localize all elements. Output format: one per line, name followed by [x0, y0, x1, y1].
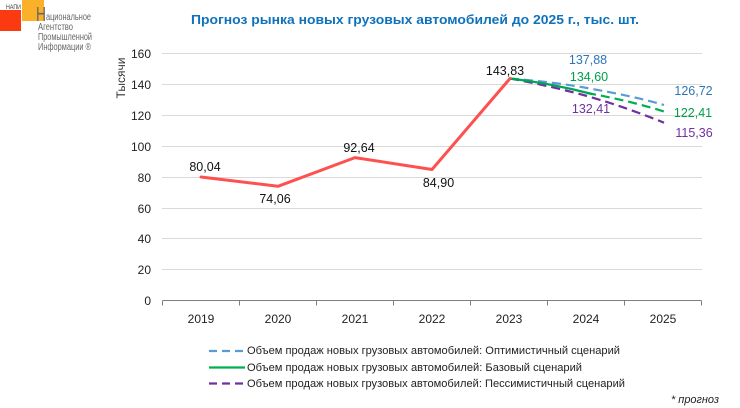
y axis labels: 80 [138, 171, 151, 185]
x axis labels: 2019 [188, 312, 215, 326]
data labels: pessimistic: 115,36 [675, 126, 713, 140]
x axis [162, 300, 702, 306]
x axis labels: 2021 [342, 312, 369, 326]
data labels: base: 134,60 [570, 70, 608, 84]
y axis labels: 120 [131, 109, 151, 123]
x axis labels: 2020 [265, 312, 292, 326]
y axis labels: 100 [131, 140, 151, 154]
data labels: optimistic: 126,72 [674, 84, 713, 98]
data labels: actual: 143,83 [486, 64, 524, 78]
legend item: optimistic: Объем продаж новых грузовых автомобилей: Оптимистичный сценарий [247, 345, 620, 357]
footnote: * прогноз [671, 394, 719, 406]
data labels: base [570, 70, 712, 120]
series: base solid [510, 78, 592, 94]
data labels: optimistic: 137,88 [569, 53, 607, 67]
x axis labels: 2022 [419, 312, 446, 326]
y axis title: Тысячи [114, 58, 128, 98]
x axis labels [188, 312, 677, 326]
logo [0, 0, 92, 53]
chart: forecast line chart [114, 47, 713, 326]
x axis labels: 2025 [650, 312, 677, 326]
legend item: base: Объем продаж новых грузовых автомобилей: Базовый сценарий [247, 362, 582, 374]
title: Прогноз рынка новых грузовых автомобилей до 2025 г., тыс. шт. [191, 12, 639, 27]
logo: Н [36, 4, 46, 26]
data labels: actual: 84,90 [423, 176, 454, 190]
y axis labels: 160 [131, 47, 151, 61]
legend [209, 345, 625, 390]
x axis labels: 2024 [573, 312, 600, 326]
y axis labels: 60 [138, 202, 151, 216]
data labels: base: 122,41 [674, 106, 712, 120]
logo: Промышленной [38, 31, 92, 43]
logo: ациональное [46, 11, 91, 23]
data labels: actual: 80,04 [189, 160, 221, 174]
data labels: optimistic [569, 53, 713, 98]
data labels: pessimistic [572, 102, 713, 140]
data labels: actual: 74,06 [259, 192, 291, 206]
series: actual sales [201, 78, 510, 186]
legend item: pessimistic: Объем продаж новых грузовых автомобилей: Пессимистичный сценарий [247, 378, 625, 390]
logo: Информации ® [38, 41, 91, 53]
y axis labels: 0 [144, 294, 151, 308]
logo: НАПИ [6, 5, 21, 11]
y axis labels: 40 [138, 232, 151, 246]
data labels: actual: 92,64 [343, 141, 375, 155]
y axis labels [131, 47, 151, 308]
series: pessimistic [510, 78, 664, 123]
y axis labels: 20 [138, 263, 151, 277]
series: base forecast dashed [587, 93, 664, 112]
grid lines [162, 54, 702, 270]
series: optimistic [510, 78, 664, 105]
logo: Агентство [38, 21, 73, 33]
data labels: actual [189, 64, 524, 206]
data labels: pessimistic: 132,41 [572, 102, 610, 116]
x axis labels: 2023 [496, 312, 523, 326]
y axis labels: 140 [131, 78, 151, 92]
